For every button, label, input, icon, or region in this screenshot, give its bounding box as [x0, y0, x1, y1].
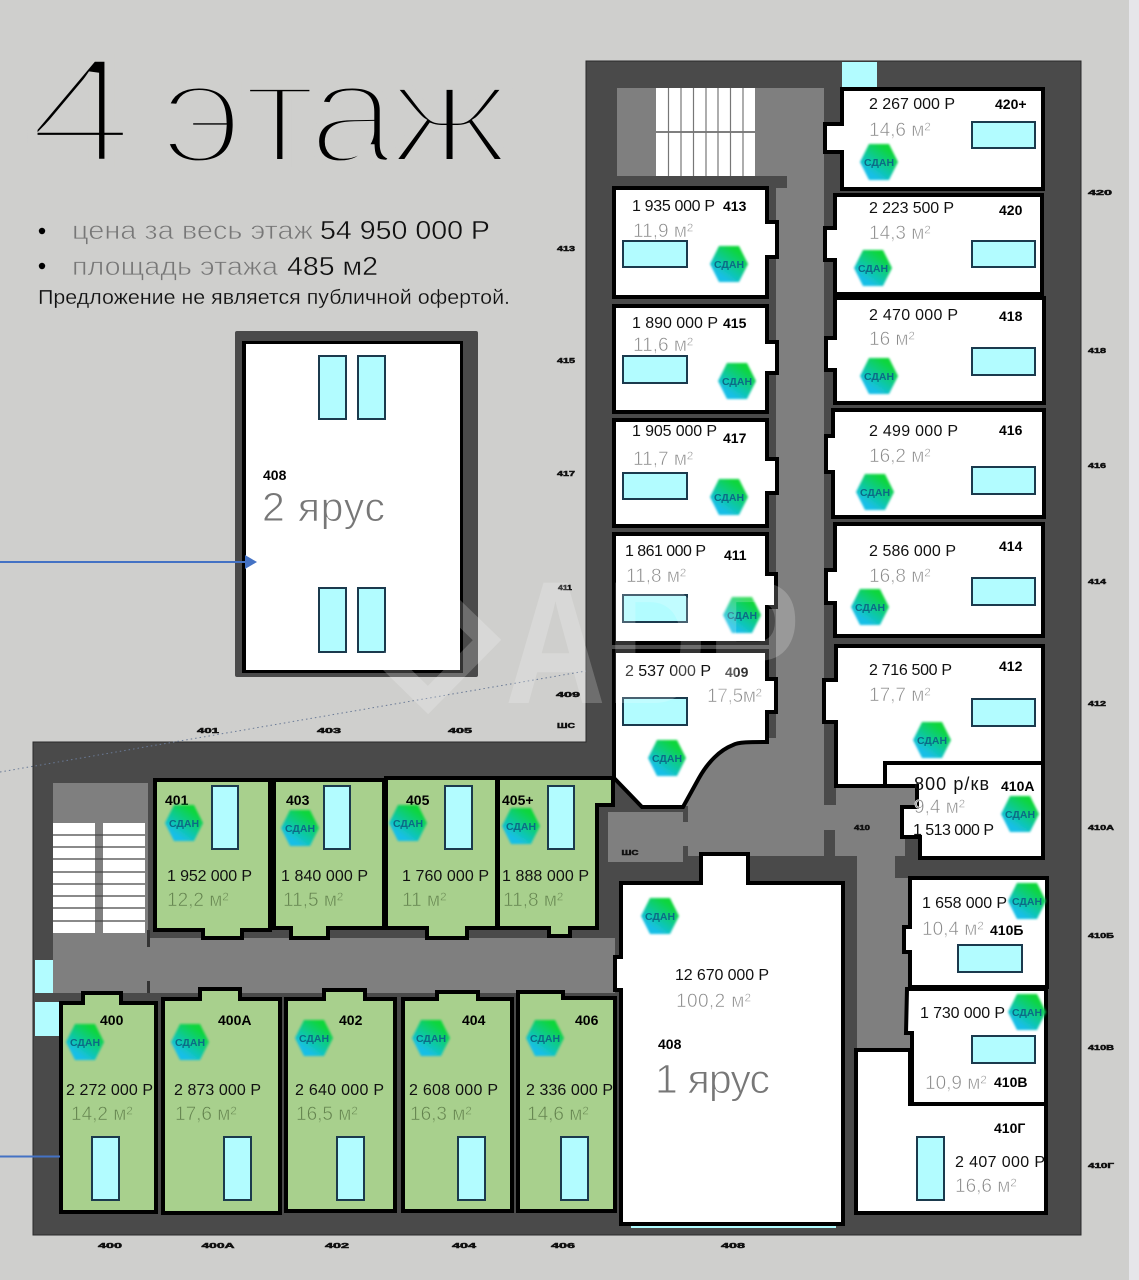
dimension labels: 409 [556, 690, 580, 699]
unit 409: СДАН [652, 753, 682, 765]
unit 403 [274, 780, 384, 938]
unit 405: СДАН [393, 818, 423, 830]
unit 410В: СДАН [1012, 1007, 1042, 1019]
dimension labels: 404 [452, 1241, 478, 1250]
unit 415: 11,6 м² [633, 335, 693, 356]
summary text block: 54 950 000 Р [320, 215, 490, 245]
unit 410Г [856, 1050, 1046, 1213]
dimension labels: 405 [448, 726, 472, 735]
dimension labels: 417 [557, 469, 575, 478]
unit 410A: 410А [1001, 778, 1034, 794]
unit 410В [906, 989, 1046, 1104]
unit 414: 414 [999, 538, 1023, 554]
dimension labels: 412 [1088, 699, 1106, 708]
unit 420+: СДАН [864, 157, 894, 169]
unit 414: СДАН [855, 602, 885, 614]
unit 410A [885, 763, 1043, 858]
arrow: tier 2 pointer [0, 555, 257, 569]
title: 4 [28, 24, 134, 196]
unit 410Б: СДАН [1012, 896, 1042, 908]
unit 418: 418 [999, 308, 1023, 324]
unit 416 [826, 410, 1044, 517]
unit 400 [61, 993, 156, 1212]
corner wall bar [617, 176, 787, 188]
unit 402: 16,5 м² [296, 1104, 358, 1125]
panel: unit 408 tier 2: 2 ярус [262, 484, 385, 530]
unit 400A: 2 873 000 Р [174, 1082, 261, 1099]
unit 410A: 800 р/кв [914, 774, 989, 794]
unit 420+ [825, 89, 1043, 189]
unit 416: 16,2 м² [869, 446, 931, 467]
unit 410A: 9,4 м² [914, 797, 965, 818]
title: т [243, 31, 317, 194]
dimension labels [98, 188, 1115, 1250]
unit 410Б: 410Б [990, 922, 1023, 938]
dimension labels: 413 [557, 244, 575, 253]
unit 400A: 17,6 м² [175, 1104, 237, 1125]
top stair hall [617, 88, 824, 176]
unit 409 [614, 651, 776, 807]
dimension labels: 402 [325, 1241, 349, 1250]
unit 404 [403, 992, 512, 1211]
unit 409: 2 537 000 Р [625, 663, 711, 680]
dimension labels: 418 [1088, 346, 1106, 355]
unit 405+: 1 888 000 Р [502, 868, 589, 885]
unit 406 [518, 992, 615, 1211]
unit 400: 400 [100, 1012, 124, 1028]
unit 411: СДАН [727, 610, 757, 622]
unit 405 [386, 778, 497, 938]
dimension labels: 408 [721, 1241, 745, 1250]
unit 405+: 405+ [502, 792, 534, 808]
unit 420: 420 [999, 202, 1023, 218]
dotted reference line [0, 671, 586, 772]
unit 418: 16 м² [869, 329, 915, 350]
dimension labels: 414 [1088, 577, 1107, 586]
unit 403: 11,5 м² [283, 890, 343, 911]
watermark: ADP [505, 546, 800, 741]
unit 420+: 2 267 000 Р [869, 96, 955, 113]
unit 405: 1 760 000 Р [402, 868, 489, 885]
unit 411: 411 [724, 547, 747, 563]
unit 412: СДАН [917, 735, 947, 747]
dimension labels: 410Г [1088, 1161, 1115, 1170]
unit 408 tier 1: 12 670 000 Р [675, 967, 769, 984]
unit 410Б [904, 878, 1047, 987]
unit 404: 16,3 м² [410, 1104, 472, 1125]
unit 400: СДАН [70, 1037, 100, 1049]
dimension labels: 410В [1088, 1043, 1115, 1052]
unit 406: 406 [575, 1012, 599, 1028]
unit 412: 2 716 500 Р [869, 662, 952, 679]
vertical corridor [608, 176, 926, 1050]
exterior windows [35, 62, 877, 1228]
unit 412 [824, 646, 1043, 786]
unit 420+: 14,6 м² [869, 120, 931, 141]
unit 410Г: 2 407 000 Р [955, 1154, 1045, 1171]
unit 400A [163, 989, 280, 1213]
unit 408 tier 1: 100,2 м² [676, 991, 751, 1012]
unit 418: СДАН [864, 371, 894, 383]
unit 410В: 10,9 м² [925, 1073, 987, 1094]
unit 408 tier 1 [615, 854, 843, 1224]
unit 402: 402 [339, 1012, 363, 1028]
unit 413: 11,9 м² [633, 221, 693, 242]
dimension labels: 416 [1088, 461, 1106, 470]
unit 405: 11 м² [402, 890, 446, 911]
summary text block [38, 215, 510, 309]
unit 405+ [498, 778, 613, 936]
unit 415: 1 890 000 Р [632, 315, 718, 332]
unit 401: 12,2 м² [167, 890, 229, 911]
unit 400A: СДАН [175, 1037, 205, 1049]
unit 401 [155, 780, 270, 938]
watermark [382, 546, 800, 741]
unit 406: СДАН [530, 1033, 560, 1045]
unit 420+: 420+ [995, 96, 1027, 112]
unit 403: СДАН [285, 823, 315, 835]
unit 420 [825, 195, 1042, 294]
unit 401: 401 [165, 792, 189, 808]
unit 410A: СДАН [1005, 809, 1035, 821]
unit 420: СДАН [858, 263, 888, 275]
unit 411: 11,8 м² [626, 566, 686, 587]
unit 409: 17,5м² [707, 686, 762, 707]
dimension labels: 406 [551, 1241, 575, 1250]
unit 401: СДАН [169, 818, 199, 830]
unit 404: СДАН [416, 1033, 446, 1045]
unit 400A: 400А [218, 1012, 251, 1028]
unit 416: 416 [999, 422, 1023, 438]
unit 408 tier 1: 1 ярус [655, 1056, 770, 1102]
unit 404: 2 608 000 Р [409, 1082, 498, 1099]
unit 406: 14,6 м² [527, 1104, 589, 1125]
dimension labels: ШС [622, 848, 639, 857]
unit 400: 14,2 м² [71, 1104, 133, 1125]
unit 414: 16,8 м² [869, 566, 931, 587]
unit 417 [614, 420, 777, 526]
unit 406: 2 336 000 Р [526, 1082, 613, 1099]
unit 402 [286, 990, 395, 1211]
dimension labels: 400 [98, 1241, 122, 1250]
unit 402: СДАН [299, 1033, 329, 1045]
unit 417: СДАН [714, 492, 744, 504]
unit 415: СДАН [722, 376, 752, 388]
panel: unit 408 tier 2 [235, 331, 478, 677]
unit 411: 1 861 000 Р [625, 543, 706, 560]
dimension labels: 415 [557, 356, 575, 365]
unit 410Г: 410Г [994, 1120, 1025, 1136]
unit 415: 415 [723, 315, 747, 331]
dimension labels: 410А [1088, 823, 1115, 832]
unit 413: СДАН [714, 259, 744, 271]
unit 410В: 1 730 000 Р [920, 1005, 1005, 1022]
unit 418 [826, 298, 1044, 403]
unit 416: СДАН [860, 487, 890, 499]
unit 410Г: 16,6 м² [955, 1176, 1017, 1197]
unit 409: 409 [725, 664, 749, 680]
unit 402: 2 640 000 Р [295, 1082, 384, 1099]
summary text block: цена за весь этаж [72, 215, 314, 245]
unit 410Б: 10,4 м² [922, 919, 984, 940]
summary text block: площадь этажа [72, 251, 279, 281]
title [28, 24, 510, 196]
dimension labels: 420 [1088, 188, 1112, 197]
panel: unit 408 tier 2: 408 [263, 467, 287, 483]
unit 410В: 410В [994, 1074, 1027, 1090]
unit 411 [614, 534, 776, 643]
unit 413 [614, 188, 777, 297]
unit 413: 413 [723, 198, 747, 214]
unit 401: 1 952 000 Р [167, 868, 252, 885]
unit 405: 405 [406, 792, 430, 808]
title: э [160, 32, 244, 195]
unit 418: 2 470 000 Р [869, 307, 958, 324]
unit 410A: 1 513 000 Р [913, 822, 994, 839]
unit 417: 1 905 000 Р [632, 423, 717, 440]
unit 414 [826, 524, 1043, 636]
unit 420: 2 223 500 Р [869, 200, 954, 217]
dimension labels: 410 [854, 823, 870, 832]
summary text block: 485 м2 [287, 251, 378, 281]
unit 403: 1 840 000 Р [281, 868, 368, 885]
unit 412: 17,7 м² [869, 685, 931, 706]
unit 405+: 11,8 м² [503, 890, 563, 911]
title: ж [389, 31, 510, 194]
unit 412: 412 [999, 658, 1023, 674]
unit 408 tier 1: 408 [658, 1036, 682, 1052]
dimension labels: ШС [557, 721, 576, 730]
unit 408 tier 1: СДАН [645, 911, 675, 923]
title: а [308, 32, 397, 195]
unit 417: 417 [723, 430, 747, 446]
unit 415 [614, 306, 777, 412]
summary text block: Предложение не является публичной офертой. [38, 287, 510, 309]
arrow: lower pointer [0, 1156, 60, 1158]
unit 403: 403 [286, 792, 310, 808]
unit 417: 11,7 м² [633, 449, 693, 470]
unit 410Б: 1 658 000 Р [922, 895, 1007, 912]
unit 413: 1 935 000 Р [632, 198, 715, 215]
unit 400: 2 272 000 Р [66, 1082, 153, 1099]
lower stair hall and corridor [53, 783, 615, 993]
unit 420: 14,3 м² [869, 223, 931, 244]
dimension labels: 401 [197, 726, 219, 735]
dimension labels: 403 [317, 726, 341, 735]
unit 404: 404 [462, 1012, 486, 1028]
unit 405+: СДАН [506, 821, 536, 833]
unit 416: 2 499 000 Р [869, 423, 958, 440]
unit 414: 2 586 000 Р [869, 543, 956, 560]
dimension labels: 400А [202, 1241, 236, 1250]
dimension labels: 410Б [1088, 931, 1115, 940]
dimension labels: 411 [558, 583, 572, 592]
